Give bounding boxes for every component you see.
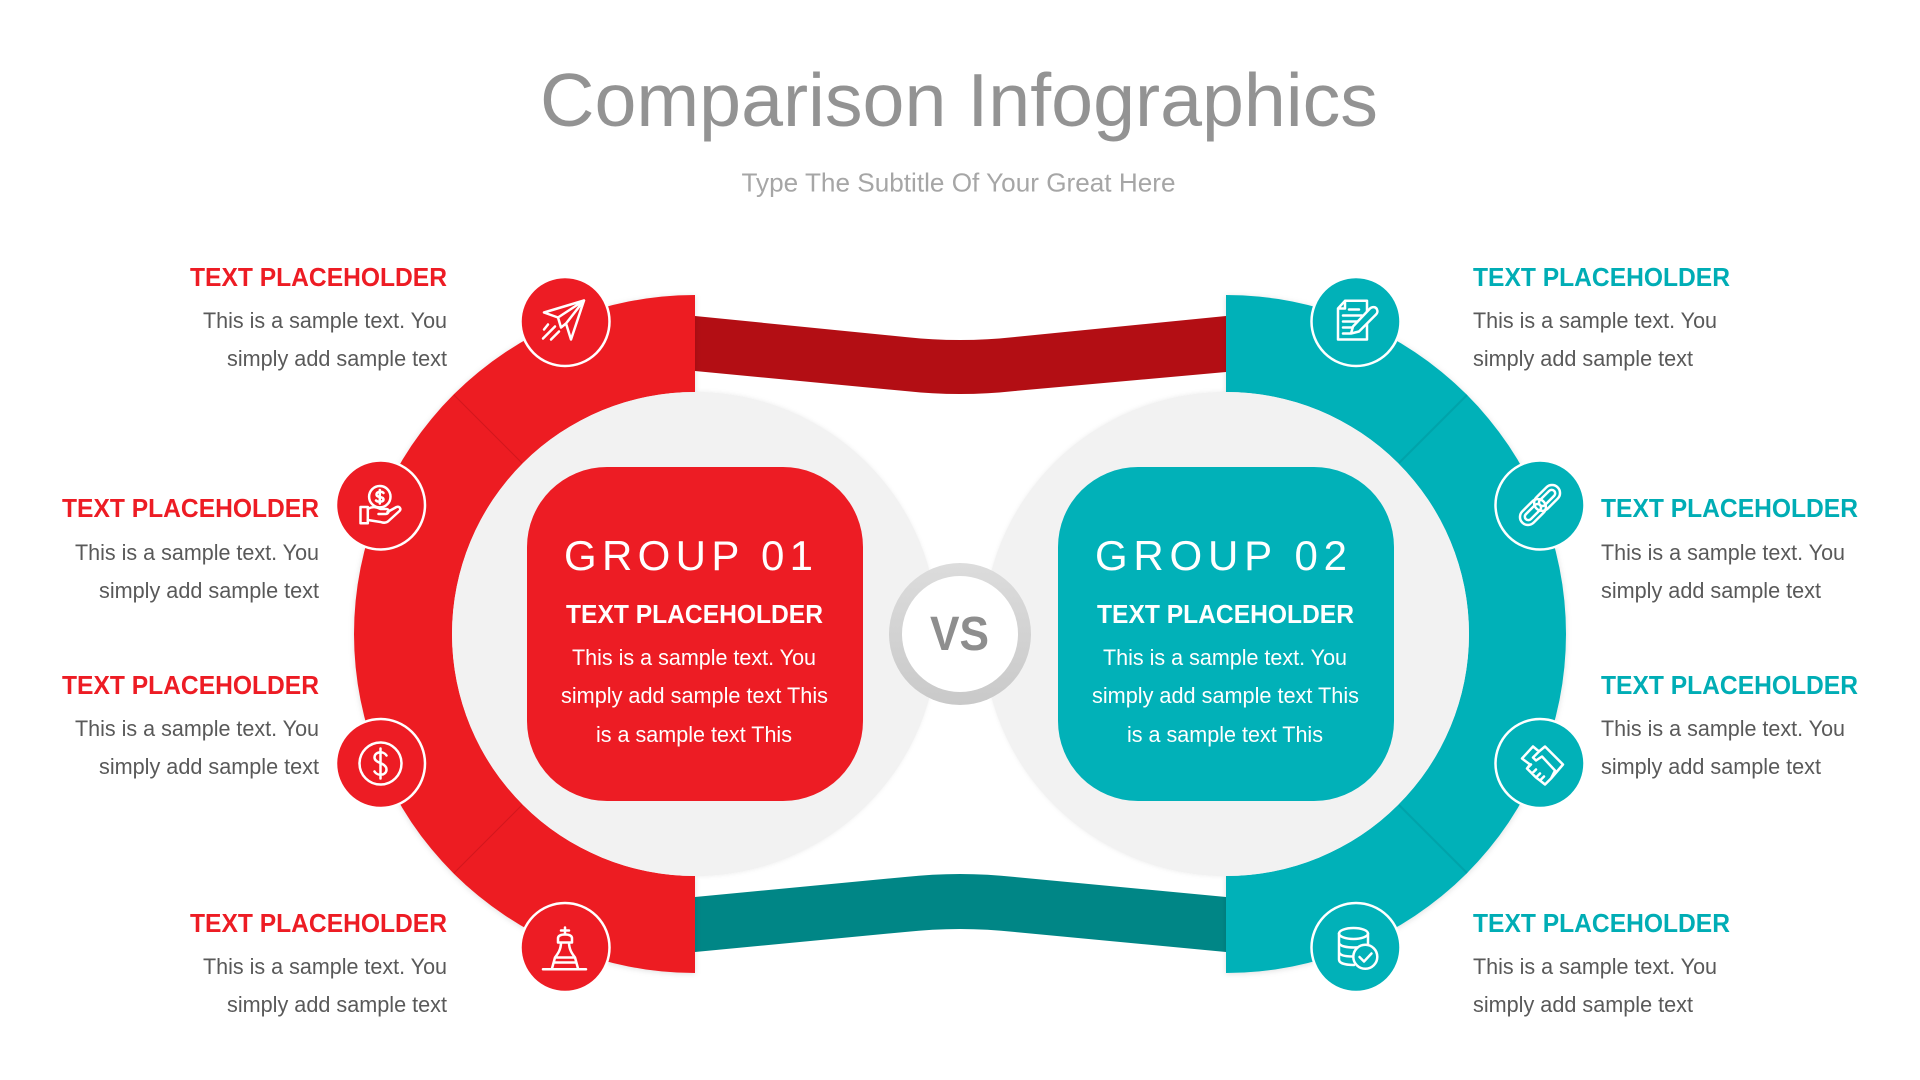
- group 01 heading: TEXT PLACEHOLDER: [566, 599, 823, 629]
- text block: right 3: simply add sample text: [1601, 754, 1821, 779]
- icon: chain link: [1496, 460, 1584, 550]
- text block: left 1: simply add sample text: [227, 346, 447, 371]
- text block: right 1: TEXT PLACEHOLDER: [1473, 262, 1730, 292]
- text block: right 4: TEXT PLACEHOLDER: [1473, 908, 1730, 938]
- text block: left 4: TEXT PLACEHOLDER: [190, 908, 447, 938]
- text block: left 4: This is a sample text. You: [203, 954, 447, 979]
- group 01 circle shadow: [453, 392, 937, 876]
- group 02 inner circle: [983, 392, 1469, 876]
- panel: group 02: [983, 295, 1566, 973]
- group 01 description: simply add sample text This: [561, 683, 828, 708]
- subtitle: Type The Subtitle Of Your Great Here: [742, 168, 1176, 198]
- group 02 description: [1092, 645, 1359, 747]
- text block: right 1: [1473, 262, 1730, 371]
- group 01 arc segment dividers: [355, 395, 522, 873]
- text block: left 1: This is a sample text. You: [203, 308, 447, 333]
- group 01 description: is a sample text This: [596, 722, 792, 747]
- text block: left 3: simply add sample text: [99, 754, 319, 779]
- group 02 heading: TEXT PLACEHOLDER: [1097, 599, 1354, 629]
- panel: group 01: [354, 295, 938, 973]
- text block: right 2: This is a sample text. You: [1601, 540, 1845, 565]
- text block: right 2: TEXT PLACEHOLDER: [1601, 493, 1858, 523]
- text block: left 2: TEXT PLACEHOLDER: [62, 493, 319, 523]
- group 01 description: This is a sample text. You: [572, 645, 816, 670]
- group 02 circle shadow: [984, 392, 1468, 876]
- group 01 outer arc: [354, 295, 695, 973]
- text block: right 4: [1473, 908, 1730, 1017]
- group 02 description: This is a sample text. You: [1103, 645, 1347, 670]
- text block: left 3: [62, 670, 319, 779]
- text block: left 2: This is a sample text. You: [75, 540, 319, 565]
- bottom connector band: [695, 874, 1226, 952]
- text block: left 1: TEXT PLACEHOLDER: [190, 262, 447, 292]
- text block: left 4: [190, 908, 447, 1017]
- text block: right 2: simply add sample text: [1601, 578, 1821, 603]
- icon: database check: [1312, 903, 1400, 992]
- group 02 description: simply add sample text This: [1092, 683, 1359, 708]
- icon: document with pencil: [1312, 277, 1400, 366]
- top connector band: [695, 316, 1226, 394]
- text block: right 4: This is a sample text. You: [1473, 954, 1717, 979]
- group 02 card: [1058, 467, 1394, 801]
- group 02 arc segment dividers: [1399, 395, 1566, 873]
- text block: left 2: simply add sample text: [99, 578, 319, 603]
- text block: right 1: simply add sample text: [1473, 346, 1693, 371]
- text block: right 4: simply add sample text: [1473, 992, 1693, 1017]
- icon: handshake: [1496, 719, 1584, 808]
- group 01 card: [527, 467, 863, 801]
- group 02 description: is a sample text This: [1127, 722, 1323, 747]
- VS badge: [889, 563, 1031, 705]
- text block: right 3: This is a sample text. You: [1601, 716, 1845, 741]
- VS badge: VS: [930, 608, 989, 661]
- group 01 inner circle: [452, 392, 938, 876]
- group 01 name: GROUP 01: [564, 532, 813, 579]
- text block: left 2: [62, 493, 319, 603]
- icon: chess king: [520, 903, 610, 992]
- text block: right 1: This is a sample text. You: [1473, 308, 1717, 333]
- title: Comparison Infographics: [540, 58, 1378, 142]
- icon: hand holding coin: [336, 460, 425, 550]
- text block: left 3: TEXT PLACEHOLDER: [62, 670, 319, 700]
- group 01 description: [561, 645, 828, 747]
- group 02 name: GROUP 02: [1095, 532, 1347, 579]
- icon: paper plane: [520, 277, 610, 366]
- text block: right 3: TEXT PLACEHOLDER: [1601, 670, 1858, 700]
- text block: right 2: [1601, 493, 1858, 603]
- icon: dollar coin: [336, 719, 425, 808]
- text block: left 4: simply add sample text: [227, 992, 447, 1017]
- text block: left 3: This is a sample text. You: [75, 716, 319, 741]
- text block: right 3: [1601, 670, 1858, 779]
- group 02 outer arc: [1226, 295, 1566, 973]
- text block: left 1: [190, 262, 447, 371]
